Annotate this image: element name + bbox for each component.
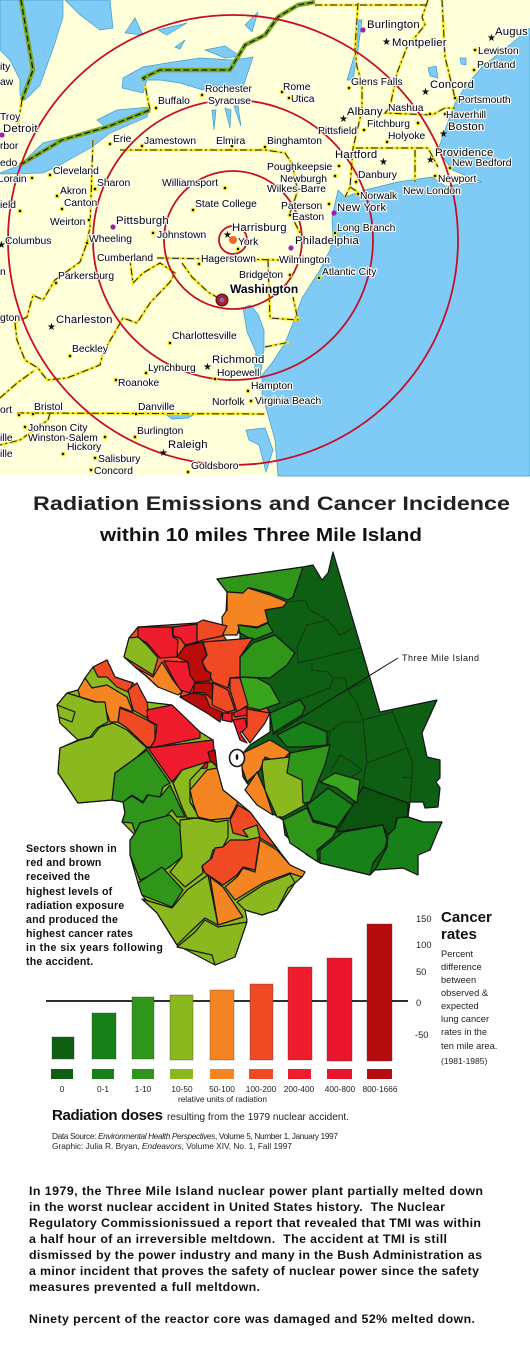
city labels: Pittsfield (318, 126, 357, 137)
city labels: Paterson (281, 201, 322, 212)
city labels: Norfolk (212, 397, 245, 408)
city labels (0, 19, 528, 477)
data source credits: Graphic: Julia R. Bryan, Endeavors, Volume XIV, No. 1, Fall 1997 (52, 1141, 292, 1151)
city labels: Wheeling (89, 234, 132, 245)
small northern lakes (65, 0, 466, 130)
state capital stars: ★ (223, 230, 232, 241)
dose labels (60, 1084, 398, 1094)
cancer rates legend: observed & (441, 988, 489, 998)
city labels: Elmira (216, 136, 245, 147)
city labels: Harrisburg (232, 222, 287, 234)
y axis values: 0 (416, 998, 421, 1008)
sectors explanatory text: highest cancer rates (26, 928, 133, 940)
cancer rates legend: difference (441, 962, 482, 972)
city labels: Burlington (367, 19, 420, 31)
summary paragraph: in the worst nuclear accident in United States history. The Nuclear (29, 1200, 445, 1214)
cancer rates legend: lung cancer (441, 1014, 489, 1024)
sectors explanatory text: received the (26, 871, 90, 883)
sectors explanatory text: in the six years following (26, 942, 163, 954)
radiation doses heading: resulting from the 1979 nuclear accident. (167, 1112, 349, 1123)
city labels: Charlottesville (172, 331, 237, 342)
sectors next to the island (242, 740, 290, 782)
summary paragraph: a minor incident that proves the safety of nuclear power since the safety (29, 1264, 479, 1278)
city labels: York (238, 237, 259, 248)
upper lakes (0, 0, 63, 100)
data source credits (52, 1131, 338, 1151)
summary paragraph: a half hour of an irreversible meltdown. The accident at TMI is still (29, 1232, 447, 1246)
sectors explanatory text (26, 843, 163, 968)
y axis values: 150 (416, 914, 432, 924)
city labels: Cumberland (97, 253, 153, 264)
city labels: Glens Falls (351, 77, 402, 88)
red and brown high exposure sectors (138, 627, 178, 658)
city labels: Canton (64, 198, 97, 209)
city labels: Holyoke (388, 131, 425, 142)
lake erie (0, 107, 150, 174)
city labels: Portsmouth (458, 95, 511, 106)
dose labels: 0 (60, 1084, 65, 1094)
city labels: Parkersburg (58, 271, 114, 282)
city labels: Lynchburg (148, 363, 196, 374)
city labels: Jamestown (144, 136, 196, 147)
summary paragraph: measures prevented a full meltdown. (29, 1280, 260, 1294)
city labels: Buffalo (158, 96, 190, 107)
state capital stars: ★ (439, 129, 448, 140)
city labels: Roanoke (118, 378, 159, 389)
three mile island marker (230, 750, 244, 766)
cancer rates legend: rates in the (441, 1027, 487, 1037)
cancer rates legend: expected (441, 1001, 479, 1011)
city labels: Charleston (56, 314, 113, 326)
city labels: Hopewell (217, 368, 259, 379)
city labels: Portland (477, 60, 516, 71)
city labels: Erie (113, 134, 132, 145)
city labels: Poughkeepsie (267, 162, 333, 173)
north central underlay (124, 623, 270, 733)
city labels: Lewiston (478, 46, 519, 57)
concentric radius rings (8, 15, 458, 465)
city labels: Concord (94, 466, 133, 477)
city labels: Danbury (358, 170, 398, 181)
city labels: Washington (230, 282, 298, 296)
city labels: Pittsburgh (116, 215, 169, 227)
city labels: gton (0, 313, 20, 324)
sectors explanatory text: and produced the (26, 914, 118, 926)
cancer rates legend (441, 909, 497, 1066)
state capital stars (0, 33, 496, 459)
city labels: Rochester (205, 84, 253, 95)
city labels: Augus (495, 26, 528, 38)
darkest band (337, 787, 408, 835)
major city purple dots (0, 27, 366, 251)
subtitle: within 10 miles Three Mile Island (99, 525, 422, 545)
city labels: Wilkes-Barre (267, 184, 326, 195)
city labels: rbor (0, 141, 19, 152)
city labels: Cleveland (53, 166, 99, 177)
eastern dark green sectors (217, 552, 442, 875)
city labels: Hartford (335, 149, 377, 161)
city labels: Newburgh (280, 174, 327, 185)
state capital stars: ★ (47, 322, 56, 333)
city labels: Rome (283, 82, 311, 93)
three mile island center point (229, 236, 237, 244)
city labels: Virginia Beach (255, 396, 321, 407)
dose labels: 400-800 (325, 1084, 356, 1094)
summary paragraph: dismissed by the power industry and many in the Bush Administration as (29, 1248, 482, 1262)
city labels: Utica (291, 94, 315, 105)
great lakes international boundary (20, 0, 315, 165)
summary paragraph: In 1979, the Three Mile Island nuclear power plant partially melted down (29, 1184, 483, 1198)
sectors explanatory text: highest levels of (26, 886, 113, 898)
city labels: edo (0, 158, 17, 169)
radiation doses heading: Radiation doses (52, 1107, 163, 1124)
y axis values: 100 (416, 940, 432, 950)
state capital stars: ★ (421, 87, 430, 98)
western sectors (93, 660, 133, 692)
state capital stars: ★ (159, 448, 168, 459)
dose labels: 800-1666 (362, 1084, 398, 1094)
dose labels: 50-100 (209, 1084, 235, 1094)
dose labels: 1-10 (135, 1084, 152, 1094)
central southern sectors (173, 762, 207, 818)
ocean and coast (262, 28, 530, 476)
city labels: Raleigh (168, 439, 208, 451)
city labels: Philadelphia (295, 235, 359, 247)
city labels: Hagerstown (201, 254, 256, 265)
three mile island label: Three Mile Island (402, 653, 479, 663)
summary paragraph (29, 1184, 483, 1326)
city labels: Norwalk (360, 191, 398, 202)
city labels: Bridgeton (239, 270, 283, 281)
city labels: Boston (448, 121, 484, 133)
city labels: Columbus (5, 236, 51, 247)
city labels: Wilmington (279, 255, 330, 266)
summary paragraph: Regulatory Commissionissued a report that revealed that TMI was within (29, 1216, 481, 1230)
y axis values: 50 (416, 967, 426, 977)
dose labels: 100-200 (246, 1084, 277, 1094)
radiation doses heading (52, 1107, 349, 1124)
city labels: ity (0, 62, 11, 73)
state capital stars: ★ (203, 362, 212, 373)
city labels: Newport (438, 174, 476, 185)
summary paragraph: Ninety percent of the reactor core was damaged and 52% melted down. (29, 1312, 475, 1326)
chesapeake bay and carolina sounds (165, 305, 273, 472)
city labels: Danville (138, 402, 175, 413)
city labels: Beckley (72, 344, 109, 355)
city labels: Johnson City (28, 423, 88, 434)
city labels: Easton (292, 212, 324, 223)
three mile island leader line (273, 658, 398, 735)
city labels: Detroit (3, 123, 38, 135)
city labels: ort (0, 405, 12, 416)
city labels: Goldsboro (191, 461, 239, 472)
sectors explanatory text: Sectors shown in (26, 843, 117, 855)
lake ontario (122, 57, 253, 93)
city labels: Providence (435, 147, 494, 159)
y axis values: -50 (415, 1030, 428, 1040)
sectors explanatory text: the accident. (26, 956, 93, 968)
state capital stars: ★ (426, 155, 435, 166)
city labels: Winston-Salem (28, 433, 98, 444)
city labels: Albany (347, 106, 383, 118)
city labels: ille (0, 433, 13, 444)
state capital stars: ★ (339, 114, 348, 125)
city labels: Nashua (388, 103, 424, 114)
city labels: ield (0, 200, 16, 211)
state borders (0, 0, 455, 445)
dose labels: 0-1 (97, 1084, 109, 1094)
city labels: Bristol (34, 402, 63, 413)
city labels: aw (0, 77, 14, 88)
choropleth map: sectors by radiation level (57, 552, 442, 965)
state capital stars: ★ (382, 37, 391, 48)
y axis values (415, 914, 432, 1040)
state capital stars: ★ (379, 157, 388, 168)
city labels: Troy (0, 112, 21, 123)
city dots (17, 48, 477, 474)
city labels: ille (0, 449, 13, 460)
data source credits: Data Source: Environmental Health Perspectives, Volume 5, Number 1, January 1997 (52, 1131, 338, 1141)
cancer rates legend: rates (441, 926, 477, 943)
city labels: Long Branch (337, 223, 396, 234)
city labels: Hampton (251, 381, 293, 392)
cancer rates legend: ten mile area. (441, 1041, 497, 1051)
axis unit label: relative units of radiation (178, 1094, 267, 1104)
city labels: Salisbury (98, 454, 141, 465)
city labels: Sharon (97, 178, 130, 189)
cancer rates legend: between (441, 975, 476, 985)
washington marker (216, 294, 228, 306)
bar chart: cancer rates by radiation dose (46, 914, 432, 1104)
city labels: New Bedford (452, 158, 512, 169)
title: Radiation Emissions and Cancer Incidence (33, 494, 510, 515)
legend swatches (51, 1069, 392, 1079)
city labels: Montpelier (392, 37, 447, 49)
western underlay (57, 660, 305, 965)
city labels: Burlington (137, 426, 184, 437)
city labels: Johnstown (157, 230, 207, 241)
city labels: n (0, 267, 6, 278)
city labels: New London (403, 186, 461, 197)
sectors explanatory text: radiation exposure (26, 900, 124, 912)
city labels: Fitchburg (367, 119, 410, 130)
map: radius rings around Three Mile Island (0, 0, 530, 477)
bars (52, 924, 392, 1061)
city labels: Richmond (212, 354, 264, 366)
city labels: Atlantic City (322, 267, 377, 278)
city labels: Akron (60, 186, 87, 197)
cancer rates legend: Cancer (441, 909, 492, 926)
city labels: Syracuse (208, 96, 251, 107)
sectors explanatory text: red and brown (26, 857, 102, 869)
dose labels: 10-50 (171, 1084, 193, 1094)
city labels: Concord (430, 79, 474, 91)
city labels: Binghamton (267, 136, 322, 147)
city labels: New York (337, 202, 386, 214)
state capital stars: ★ (487, 33, 496, 44)
cancer rates legend: Percent (441, 949, 473, 959)
city labels: Haverhill (446, 110, 486, 121)
city labels: Hickory (67, 442, 102, 453)
city labels: State College (195, 199, 257, 210)
dose labels: 200-400 (284, 1084, 315, 1094)
internal sector lines (285, 600, 413, 803)
cancer rates legend: (1981-1985) (441, 1056, 487, 1066)
top green and orange sectors (217, 567, 303, 600)
city labels: Weirton (50, 217, 86, 228)
city labels: Williamsport (162, 178, 218, 189)
